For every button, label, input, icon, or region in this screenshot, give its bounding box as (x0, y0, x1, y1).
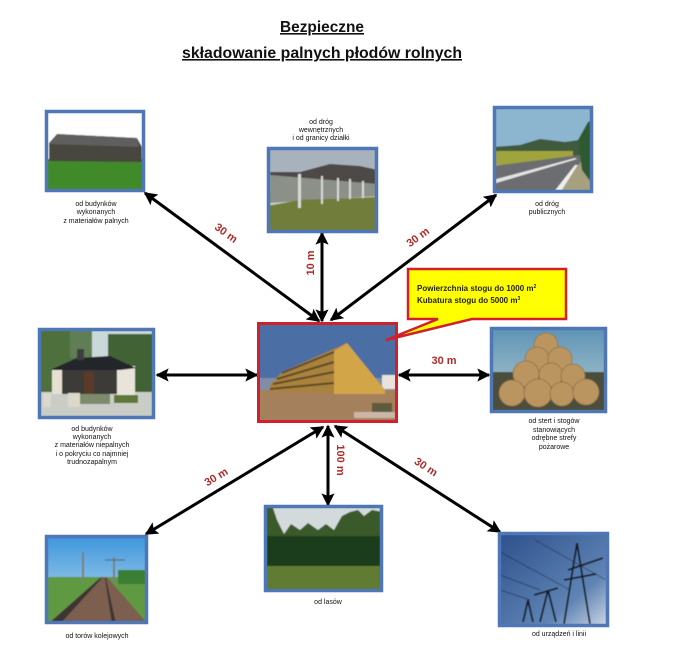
caption: od stert i stogów (529, 418, 580, 425)
distance labels (203, 221, 457, 489)
photo: bales (493, 330, 604, 410)
photo: fence (270, 150, 375, 230)
distance labels: 100 m (334, 444, 346, 476)
caption: stanowiących (533, 427, 575, 434)
caption: odrębne strefy (532, 435, 577, 442)
callout: stack limits: Powierzchnia stogu do 1000 m (417, 284, 533, 293)
caption (292, 119, 350, 142)
caption: wewnętrznych (298, 127, 343, 134)
caption: od budynków (75, 201, 118, 208)
panel: barn, combustible buildings (45, 110, 145, 225)
photo: house (41, 331, 152, 416)
panel: power lines (498, 532, 609, 638)
panel: hay bales, other stacks (490, 327, 607, 451)
photo: haystack (260, 325, 395, 420)
arrow: to power lines (335, 426, 500, 532)
caption: wykonanych (72, 434, 111, 441)
caption (55, 426, 129, 466)
panel: house, non-combustible buildings (38, 328, 155, 466)
caption: z materiałów niepalnych (55, 442, 129, 449)
callout: stack limits: 3 (517, 296, 520, 302)
arrow: to combustible buildings (145, 193, 319, 321)
distance labels: 30 m (405, 225, 432, 250)
arrow: to other stacks (399, 374, 489, 376)
photo: road (496, 109, 590, 190)
caption: od dróg (535, 201, 559, 208)
panel: road, public roads (493, 106, 593, 216)
panel: fence, internal roads and plot boundary (267, 119, 378, 233)
arrow: to non-combustible buildings (157, 374, 257, 376)
photo: tracks (48, 538, 145, 621)
callout: stack limits (386, 269, 566, 340)
arrow: to railway tracks (146, 427, 323, 534)
caption: od urządzeń i linii (532, 631, 586, 638)
title: składowanie palnych płodów rolnych (182, 45, 462, 62)
caption (63, 201, 129, 225)
arrows between the central stack and surrounding objects (145, 193, 500, 534)
arrow: to forests (326, 426, 330, 505)
callout: stack limits: Kubatura stogu do 5000 m (417, 296, 517, 305)
caption: od torów kolejowych (65, 633, 129, 640)
title (182, 19, 462, 62)
caption: wykonanych (76, 209, 115, 216)
caption (529, 418, 580, 451)
title: Bezpieczne (280, 19, 364, 36)
photo: pylons (501, 535, 606, 624)
callout: stack limits: 2 (533, 284, 536, 290)
caption: trudnozapalnym (67, 459, 117, 466)
photo: barn (48, 133, 142, 189)
distance labels: 30 m (412, 456, 440, 479)
distance labels: 10 m (305, 250, 317, 276)
caption: od dróg (309, 119, 333, 126)
panel: railway tracks (45, 535, 148, 640)
caption: od budynków (71, 426, 114, 433)
distance labels: 30 m (203, 466, 230, 489)
panel: forest (264, 505, 383, 606)
caption: z materiałów palnych (63, 218, 129, 225)
arrow: to public roads (331, 195, 496, 320)
distance labels: 30 m (431, 355, 457, 367)
distance labels: 30 m (212, 221, 240, 246)
caption: i o pokryciu co najmniej (56, 451, 129, 458)
caption: i od granicy działki (292, 135, 350, 142)
caption: publicznych (529, 209, 565, 216)
caption (529, 201, 565, 216)
panel: central haystack (257, 322, 398, 423)
caption: pożarowe (539, 444, 569, 451)
arrow: to internal roads (320, 233, 324, 321)
photo: forest (267, 508, 380, 589)
caption: od lasów (314, 599, 343, 606)
